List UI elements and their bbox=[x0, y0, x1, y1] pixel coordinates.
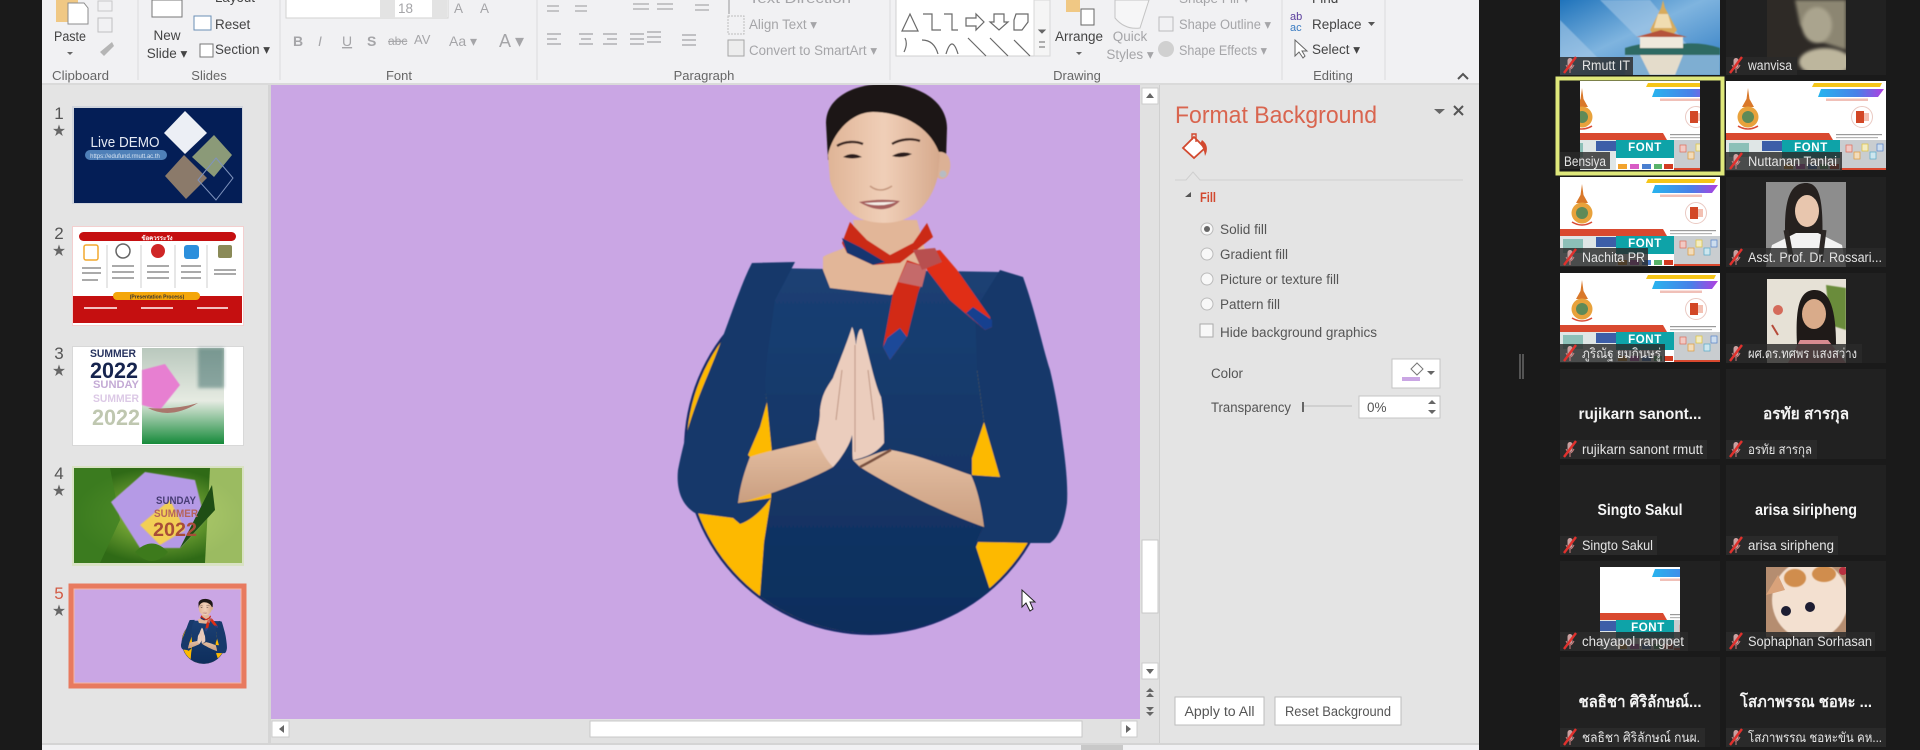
slide numbers and stars: 3 bbox=[54, 344, 64, 363]
fill options: Picture or texture fill bbox=[1220, 272, 1339, 287]
tile: wanvisa: wanvisa bbox=[1747, 58, 1792, 73]
tile: Asst. Prof. Dr. Rossari bbox=[1726, 177, 1886, 267]
icon: paint bucket bbox=[1183, 134, 1207, 158]
editing group: ab bbox=[1290, 11, 1302, 23]
slides group: Section ▾ bbox=[215, 42, 270, 57]
clipboard group: Clipboard bbox=[52, 68, 109, 83]
tile: sopaphan: โสภาพรรณ ชอหะขัน คห... bbox=[1748, 729, 1882, 745]
gallery divider handle bbox=[1520, 354, 1523, 379]
slide canvas bbox=[271, 84, 1140, 719]
font group: S bbox=[367, 33, 376, 49]
slide numbers and stars: 2 bbox=[54, 224, 64, 243]
slides group bbox=[147, 0, 270, 83]
tile: Bensiya active speaker: FONT bbox=[1628, 142, 1662, 154]
tile: Rmutt IT: Rmutt IT bbox=[1582, 58, 1630, 73]
ribbon bbox=[42, 0, 1479, 85]
tile: second row slide share: FONT bbox=[1628, 334, 1662, 346]
tile: rujikarn sanont bbox=[1560, 369, 1720, 459]
thumbnail 2: red summary slide bbox=[72, 226, 244, 326]
slide numbers and stars bbox=[52, 104, 66, 618]
editing group: Replace bbox=[1312, 17, 1362, 32]
tile: rujikarn sanont: rujikarn sanont rmutt bbox=[1582, 442, 1703, 457]
thumbnail 4: purple water lily bbox=[72, 466, 244, 566]
tile: Nuttanan Tanlai: FONT bbox=[1794, 142, 1828, 154]
tile: Bensiya active speaker bbox=[1558, 78, 1722, 174]
thumbnail 1: Live DEMO: Live DEMO bbox=[90, 135, 160, 151]
thumbnail 3: Summer 2022 lotus: SUNDAY bbox=[93, 379, 140, 391]
font group bbox=[286, 0, 524, 83]
tile: Bensiya active speaker: Bensiya bbox=[1564, 154, 1606, 169]
editing group: ac bbox=[1290, 22, 1302, 34]
font group: U bbox=[342, 33, 352, 49]
color control bbox=[1211, 359, 1440, 388]
tile: arisa siripheng bbox=[1726, 465, 1886, 555]
fill options: Hide background graphics bbox=[1220, 325, 1377, 340]
editing group: Select ▾ bbox=[1312, 42, 1360, 57]
slide numbers and stars: 4 bbox=[54, 464, 64, 483]
format background panel bbox=[1159, 85, 1479, 745]
slides group: New bbox=[153, 28, 181, 43]
paragraph group bbox=[547, 0, 877, 83]
panel controls bbox=[1434, 106, 1463, 115]
fill options bbox=[1200, 222, 1377, 340]
apply to all button: Apply to All bbox=[1184, 704, 1254, 719]
tile: Nachita PR bbox=[1560, 177, 1720, 267]
transparency control bbox=[1211, 396, 1440, 418]
drawing group: Shape Outline ▾ bbox=[1179, 17, 1271, 32]
transparency control: 0% bbox=[1367, 400, 1387, 415]
tile: chayapol rangpet bbox=[1560, 567, 1688, 651]
tile: wanvisa bbox=[1726, 0, 1846, 75]
drawing group bbox=[896, 0, 1271, 83]
editing group: Editing bbox=[1313, 68, 1353, 83]
thumbnail 1: Live DEMO bbox=[72, 106, 243, 204]
tile: orathai bbox=[1726, 369, 1886, 459]
tile: Sophaphan Sorhasan bbox=[1726, 567, 1875, 651]
paragraph group: Paragraph bbox=[674, 68, 734, 83]
tile: woman with flowers: ผศ.ดร.ทศพร แสงสว่าง bbox=[1748, 346, 1857, 361]
thumbnail 4: purple water lily: 2022 bbox=[153, 520, 197, 541]
thumbnail 3: Summer 2022 lotus: 2022 bbox=[90, 358, 138, 383]
slides group: Reset bbox=[215, 17, 251, 32]
tile: arisa siripheng: arisa siripheng bbox=[1755, 502, 1857, 519]
tile: orathai: อรทัย สารกุล bbox=[1763, 405, 1849, 424]
tile: chonthicha: ชลธิชา ศิริลักษณ์ กนผ. bbox=[1582, 729, 1700, 745]
slide numbers and stars: 1 bbox=[54, 104, 64, 123]
font group: Aa ▾ bbox=[449, 33, 477, 49]
tile: sopaphan: โสภาพรรณ ชอหะ ... bbox=[1739, 691, 1872, 711]
tile: Sophaphan Sorhasan: Sophaphan Sorhasan bbox=[1748, 634, 1872, 649]
font group: 18 bbox=[398, 1, 413, 16]
drawing group: Arrange bbox=[1055, 29, 1103, 44]
mouse cursor bbox=[1022, 590, 1035, 611]
tile: arisa siripheng: arisa siripheng bbox=[1748, 538, 1834, 553]
reset background button bbox=[1275, 697, 1401, 725]
tile: Singto Sakul bbox=[1560, 465, 1720, 555]
slides group: Slide ▾ bbox=[147, 46, 187, 61]
slide numbers and stars: ★ bbox=[52, 123, 66, 138]
editing group bbox=[1290, 0, 1468, 83]
vertical scrollbar bbox=[1140, 85, 1159, 745]
drawing group: Shape Effects ▾ bbox=[1179, 43, 1267, 58]
slide numbers and stars: ★ bbox=[52, 483, 66, 498]
fill options: Gradient fill bbox=[1220, 247, 1288, 262]
paragraph group: Align Text ▾ bbox=[749, 17, 817, 32]
clipboard group: Paste bbox=[54, 29, 86, 44]
tile: Nachita PR: FONT bbox=[1628, 238, 1662, 250]
slides group: Slides bbox=[191, 68, 227, 83]
status bar strip bbox=[42, 743, 1479, 750]
transparency control: Transparency bbox=[1211, 400, 1291, 415]
thumbnail 4: purple water lily: SUMMER bbox=[154, 508, 198, 520]
font group: Font bbox=[386, 68, 412, 83]
reset background button: Reset Background bbox=[1285, 704, 1391, 719]
tile: Nuttanan Tanlai: Nuttanan Tanlai bbox=[1748, 154, 1837, 169]
font group: A bbox=[480, 1, 489, 16]
tile: second row slide share: ภูริณัฐ ยมกินษรู่ bbox=[1582, 346, 1661, 362]
slide numbers and stars: ★ bbox=[52, 363, 66, 378]
tile: Singto Sakul: Singto Sakul bbox=[1582, 538, 1653, 553]
thumbnail 3: Summer 2022 lotus bbox=[72, 346, 244, 446]
tile: Nachita PR: Nachita PR bbox=[1582, 250, 1645, 265]
slide thumbnails pane bbox=[42, 85, 271, 745]
color control: Color bbox=[1211, 366, 1243, 381]
tile: Nuttanan Tanlai bbox=[1726, 81, 1886, 171]
slide numbers and stars: 5 bbox=[54, 584, 64, 603]
thumbnail 5: selected slide bbox=[71, 586, 244, 686]
thumbnail 1: Live DEMO: https://edufund.rmutt.ac.th bbox=[90, 154, 160, 160]
font group: I bbox=[318, 33, 322, 49]
font group: A ▾ bbox=[499, 31, 524, 51]
thumbnail 2: red summary slide: ข้อควรระวัง bbox=[141, 234, 173, 242]
thumbnail 3: Summer 2022 lotus: SUMMER bbox=[93, 393, 139, 405]
slide numbers and stars: ★ bbox=[52, 603, 66, 618]
tile: Asst. Prof. Dr. Rossari: Asst. Prof. Dr. Rossari... bbox=[1748, 250, 1882, 265]
tile: Singto Sakul: Singto Sakul bbox=[1598, 502, 1682, 519]
font group: AV bbox=[414, 32, 431, 47]
thumbnail 2: red summary slide: (Presentation Process) bbox=[130, 294, 185, 300]
slide numbers and stars: ★ bbox=[52, 243, 66, 258]
drawing group: Drawing bbox=[1053, 68, 1101, 83]
tile: orathai: อรทัย สารกุล bbox=[1748, 442, 1812, 458]
panel title: Format Background bbox=[1175, 102, 1377, 129]
drawing group: Quick bbox=[1113, 29, 1148, 44]
horizontal scrollbar bbox=[271, 719, 1140, 743]
font group: B bbox=[293, 33, 303, 49]
tile: chonthicha: ชลธิชา ศิริลักษณ์... bbox=[1578, 692, 1702, 711]
thumbnail 3: Summer 2022 lotus: 2022 bbox=[92, 405, 140, 430]
tile: second row slide share bbox=[1560, 273, 1720, 363]
drawing group: Styles ▾ bbox=[1106, 47, 1154, 62]
mini presenter bbox=[181, 599, 227, 665]
apply to all button bbox=[1175, 697, 1264, 725]
tile: chayapol rangpet: chayapol rangpet bbox=[1582, 634, 1684, 649]
tile: rujikarn sanont: rujikarn sanont... bbox=[1578, 406, 1702, 423]
paragraph group: Convert to SmartArt ▾ bbox=[749, 43, 877, 58]
fill options: Pattern fill bbox=[1220, 297, 1280, 312]
font group: abc bbox=[388, 34, 407, 48]
tile: sopaphan bbox=[1726, 657, 1886, 747]
tile: woman with flowers bbox=[1726, 279, 1862, 363]
tile: chayapol rangpet: FONT bbox=[1631, 622, 1665, 634]
clipboard group bbox=[52, 0, 114, 83]
zoom participant gallery bbox=[1558, 0, 1886, 747]
font group: A bbox=[454, 1, 463, 16]
thumbnail 3: Summer 2022 lotus: SUMMER bbox=[90, 348, 136, 360]
fill section heading: Fill bbox=[1200, 190, 1216, 205]
thumbnail 4: purple water lily: SUNDAY bbox=[156, 495, 197, 507]
fill section heading bbox=[1185, 190, 1216, 205]
tile: chonthicha bbox=[1560, 657, 1720, 747]
fill options: Solid fill bbox=[1220, 222, 1267, 237]
tile: Rmutt IT bbox=[1560, 0, 1720, 75]
presenter photo with circle bbox=[678, 84, 1067, 640]
